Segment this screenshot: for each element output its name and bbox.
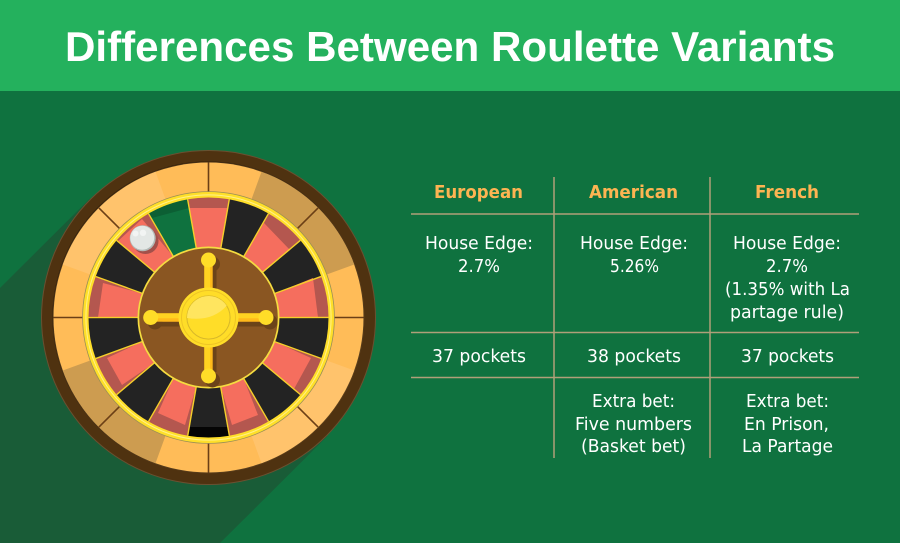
long shadow of wheel bbox=[0, 199, 327, 543]
column: French: House Edge: bbox=[733, 234, 841, 254]
spoke shadows bbox=[148, 256, 278, 388]
title: Differences Between Roulette Variants bbox=[65, 23, 835, 70]
column: French: 37 pockets bbox=[741, 347, 834, 367]
spokes bbox=[143, 252, 274, 384]
column: French: (1.35% with La bbox=[725, 280, 850, 300]
ball bbox=[130, 225, 158, 254]
roulette wheel bbox=[41, 150, 376, 485]
tan outer track bbox=[54, 162, 364, 472]
column: European: House Edge: bbox=[425, 234, 533, 254]
column: American: Extra bet: bbox=[592, 392, 675, 412]
column: American: (Basket bet) bbox=[581, 437, 686, 457]
column: French: La Partage bbox=[742, 437, 833, 457]
outer wooden rim bbox=[41, 150, 376, 485]
column: American bbox=[575, 183, 692, 457]
column: American: 5.26% bbox=[610, 257, 659, 277]
wheel hub bbox=[138, 246, 280, 388]
column: European: European bbox=[434, 183, 523, 203]
title banner bbox=[0, 0, 900, 91]
column: French: 2.7% bbox=[766, 257, 808, 277]
column: European: 37 pockets bbox=[432, 347, 526, 367]
column: American: 38 pockets bbox=[587, 347, 681, 367]
yellow pocket ring bbox=[82, 191, 335, 444]
column: American: House Edge: bbox=[580, 234, 688, 254]
pockets bbox=[87, 197, 330, 438]
column: French: French bbox=[755, 183, 819, 203]
column: French bbox=[725, 183, 850, 457]
column: European bbox=[425, 183, 533, 367]
column: European: 2.7% bbox=[458, 257, 500, 277]
column: French: Extra bet: bbox=[746, 392, 829, 412]
column: French: partage rule) bbox=[730, 303, 844, 323]
column: American: Five numbers bbox=[575, 415, 692, 435]
comparison table bbox=[411, 177, 859, 458]
table grid bbox=[411, 177, 859, 458]
column: American: American bbox=[589, 183, 678, 203]
column: French: En Prison, bbox=[744, 415, 829, 435]
centre cap bbox=[178, 288, 238, 348]
